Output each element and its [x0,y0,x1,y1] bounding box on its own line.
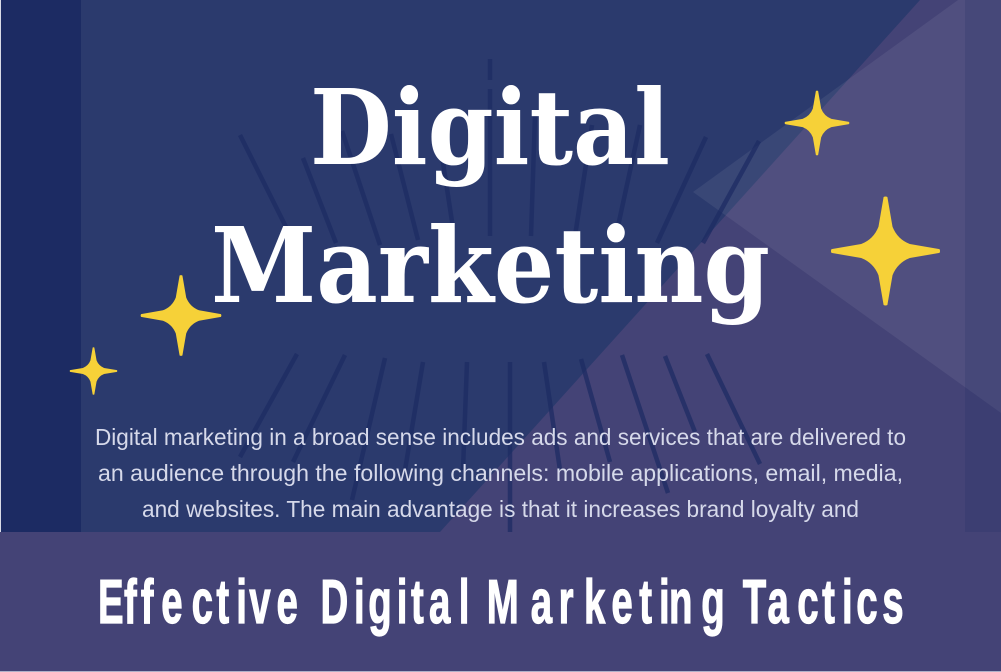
text block: intro paragraph: and websites. The main advantage is that it increases brand loyalty and [142,496,859,522]
rays: sunburst lines around title [240,59,760,532]
title: Digital [310,66,670,189]
text block: intro paragraph [95,424,906,522]
panel: right dark strip [965,0,1001,532]
panel: left dark strip [1,0,81,532]
panel: bottom heading band [0,532,1001,671]
icon: small star left [70,347,117,395]
heading: effective digital marketing tactics [98,567,904,636]
heading: effective digital marketing tactics: Marketing [487,567,725,636]
heading: effective digital marketing tactics: Effective [98,567,298,636]
panel: purple diagonal background [440,0,1001,532]
text block: intro paragraph: an audience through the following channels: mobile applications, email, media, [98,460,903,486]
heading: effective digital marketing tactics: Digital [321,567,469,636]
text block: intro paragraph: Digital marketing in a broad sense includes ads and services that are delivered to [95,424,906,450]
title: Marketing [211,204,770,327]
icon: medium star left [141,275,221,356]
icon: large star right [831,196,940,306]
heading: effective digital marketing tactics: Tactics [743,567,904,636]
panel: light translucent triangle [693,0,1001,413]
icon: small star upper right [785,91,849,155]
title [211,66,770,327]
